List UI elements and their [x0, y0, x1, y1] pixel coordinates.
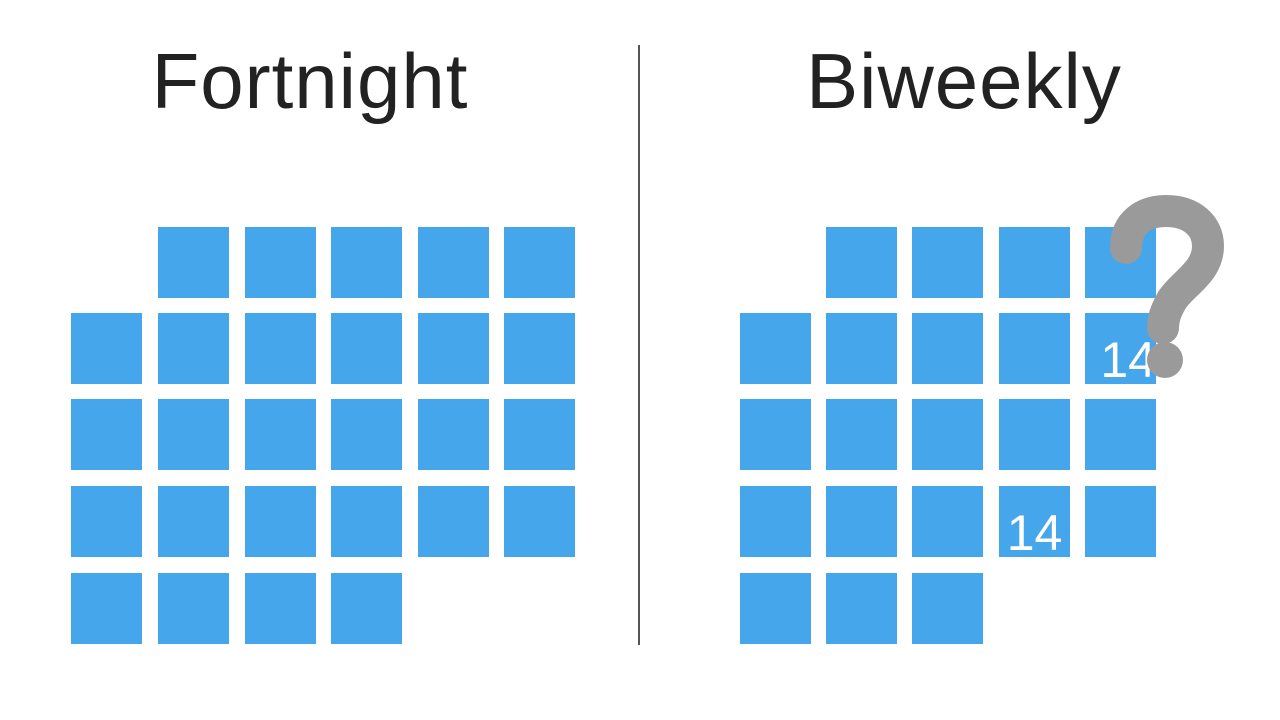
title: Fortnight: Fortnight: [152, 37, 468, 125]
divider: [638, 45, 640, 645]
grid: biweekly calendar: 14: [1007, 505, 1062, 561]
grid: fortnight calendar: [71, 227, 575, 644]
grid: biweekly calendar: [740, 227, 1156, 644]
title: Biweekly: Biweekly: [806, 37, 1122, 125]
grid: biweekly calendar: 14: [1100, 332, 1156, 388]
